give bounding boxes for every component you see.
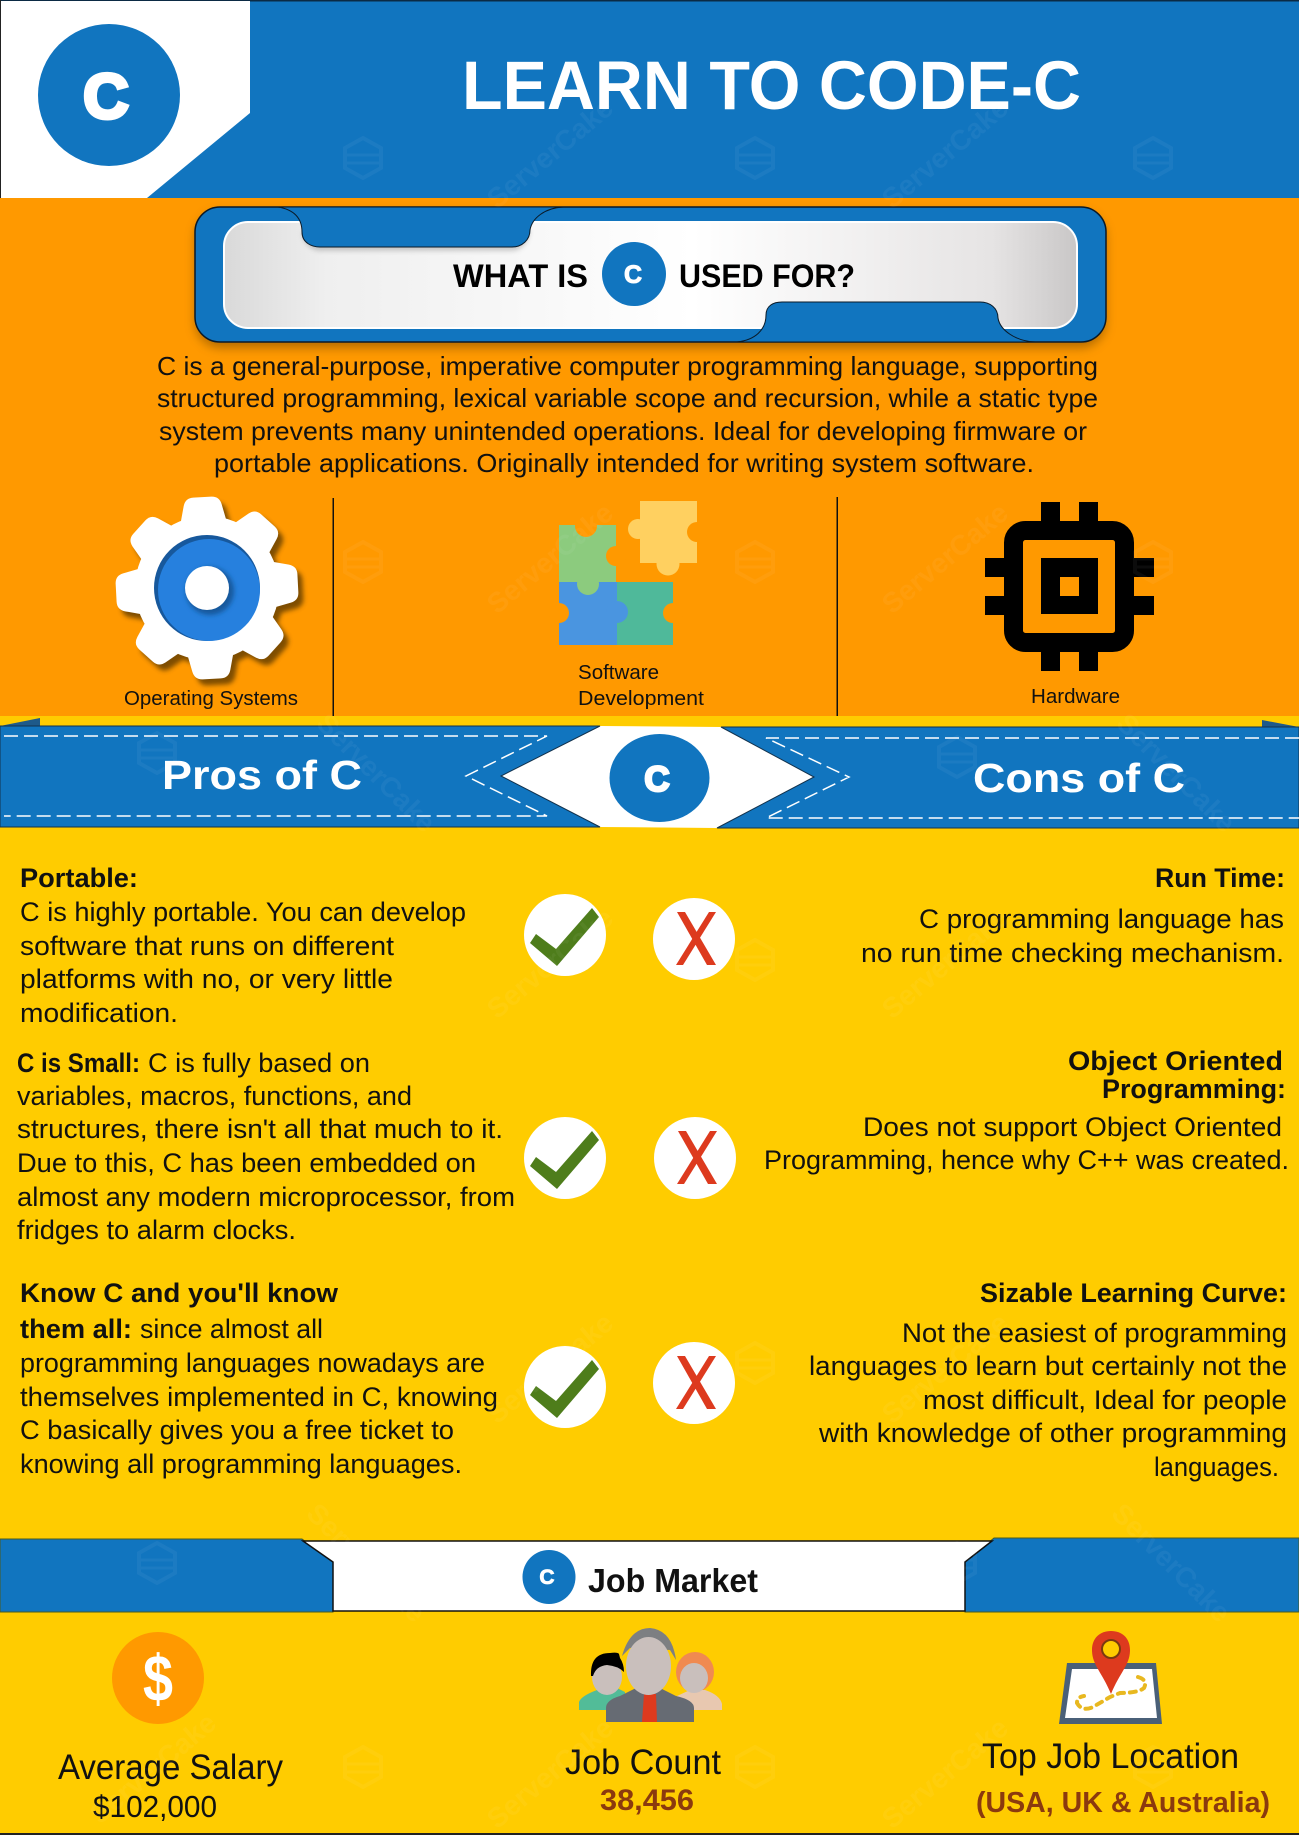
pro: portable: modification. — [20, 998, 178, 1028]
job count: 38,456 — [600, 1784, 694, 1817]
watermarks: ServerCake — [481, 497, 619, 620]
con: object oriented programming: Programming, hence why C++ was created. — [764, 1145, 1289, 1175]
label: hardware: Hardware — [1031, 686, 1120, 708]
con: sizable learning curve: languages. — [1154, 1452, 1279, 1482]
job market C badge: C — [539, 1566, 555, 1589]
pros ribbon: Pros of C — [162, 752, 362, 798]
pro: C is small: structures, there isn't all that much to it. — [17, 1114, 503, 1144]
intro paragraph: structured programming, lexical variable scope and recursion, while a static type — [157, 383, 1098, 413]
icon: check row 1 — [524, 894, 606, 976]
label: software development — [578, 662, 704, 710]
icon: cross row 2 — [654, 1117, 736, 1199]
con: object oriented programming: Programming: — [1102, 1074, 1286, 1104]
pro: portable: C is highly portable. You can develop — [20, 897, 466, 927]
logo: C badge: C — [83, 62, 129, 132]
logo: C badge — [38, 24, 180, 166]
watermarks: ServerCake — [481, 1307, 619, 1430]
con: run time: C programming language has — [919, 904, 1284, 934]
panel heading: WHAT IS — [453, 258, 588, 294]
pro: portable: Portable: — [20, 863, 138, 893]
watermarks: ServerCake — [876, 902, 1014, 1025]
job market heading: Job Market — [588, 1562, 758, 1599]
con: object oriented programming — [764, 1046, 1289, 1175]
label: software development: Software — [578, 662, 659, 684]
top tab — [278, 207, 563, 247]
top job location: Top Job Location — [982, 1737, 1239, 1776]
average salary: $102,000 — [93, 1789, 217, 1824]
pro: know C — [20, 1278, 498, 1479]
watermarks: ServerCake — [481, 902, 619, 1025]
icon: cross row 3 — [653, 1342, 735, 1424]
panel heading: USED FOR? — [679, 258, 855, 294]
icon: map pin — [1059, 1631, 1162, 1724]
pro: C is small: variables, macros, functions, and — [17, 1081, 412, 1111]
watermarks: ServerCake — [876, 92, 1014, 215]
intro paragraph: portable applications. Originally intended for writing system software. — [214, 448, 1034, 478]
con: sizable learning curve: Sizable Learning Curve: — [980, 1278, 1287, 1308]
watermarks: ServerCake — [481, 92, 619, 215]
watermarks: ServerCake — [311, 707, 442, 838]
job count: Job Count — [565, 1743, 721, 1782]
con: run time: no run time checking mechanism. — [861, 938, 1284, 968]
pro: know C: Know C and you'll know — [20, 1278, 338, 1308]
pro: know C: since almost all — [140, 1314, 323, 1344]
icon: check row 2 — [524, 1117, 606, 1199]
pro: C is small — [17, 1048, 515, 1245]
con: sizable learning curve: Not the easiest of programming — [902, 1318, 1287, 1348]
icon: gear (operating systems) — [115, 496, 304, 686]
top job location: (USA, UK & Australia) — [976, 1787, 1270, 1819]
panel heading — [453, 242, 855, 306]
watermarks: ServerCake — [1111, 707, 1242, 838]
job market C badge — [522, 1550, 576, 1604]
con: run time — [861, 863, 1285, 968]
pros and cons ribbon — [0, 718, 1299, 828]
con: run time: Run Time: — [1155, 863, 1285, 893]
watermarks: ServerCake — [1106, 1497, 1237, 1628]
cons ribbon: Cons of C — [973, 755, 1185, 801]
con: sizable learning curve: most difficult, Ideal for people — [923, 1385, 1287, 1415]
average salary — [58, 1748, 283, 1824]
cons ribbon — [717, 727, 1299, 828]
icon: check row 3 — [524, 1346, 606, 1428]
icon: cross row 1 — [653, 898, 735, 980]
watermarks: ServerCake — [84, 1707, 222, 1830]
pro: C is small: C is Small: — [17, 1048, 140, 1078]
pro: know C: them all: — [20, 1314, 132, 1344]
icon: salary dollar — [112, 1632, 204, 1724]
pro: portable — [20, 863, 466, 1028]
watermarks: ServerCake — [481, 1712, 619, 1835]
pro: portable: software that runs on different — [20, 931, 395, 961]
pro: know C: C basically gives you a free ticket to — [20, 1415, 454, 1445]
pro: C is small: C is fully based on — [148, 1048, 370, 1078]
panel: what is C used for — [195, 207, 1106, 348]
watermarks: ServerCake — [876, 497, 1014, 620]
con: sizable learning curve: with knowledge of other programming — [818, 1418, 1287, 1448]
pro: C is small: Due to this, C has been embedded on — [17, 1148, 476, 1178]
average salary: Average Salary — [58, 1748, 283, 1787]
header banner — [0, 0, 1299, 198]
intro paragraph: C is a general-purpose, imperative computer programming language, supporting — [157, 351, 1098, 381]
pro: know C: knowing all programming languages. — [20, 1449, 462, 1479]
top job location — [976, 1737, 1270, 1819]
ribbon C badge — [610, 734, 710, 822]
con: sizable learning curve — [809, 1278, 1287, 1482]
job count — [565, 1743, 721, 1817]
watermarks: ServerCake — [301, 1497, 432, 1628]
pros ribbon — [0, 726, 600, 827]
intro paragraph: system prevents many unintended operations. Ideal for developing firmware or — [159, 416, 1087, 446]
label: software development: Development — [578, 688, 704, 710]
pro: C is small: fridges to alarm clocks. — [17, 1215, 296, 1245]
intro paragraph — [157, 351, 1098, 478]
pro: know C: themselves implemented in C, knowing — [20, 1382, 498, 1412]
con: object oriented programming: Object Oriented — [1068, 1046, 1283, 1076]
pro: portable: platforms with no, or very little — [20, 964, 393, 994]
pro: know C: programming languages nowadays are — [20, 1348, 485, 1378]
job market banner — [0, 1538, 1299, 1612]
icon: people — [579, 1628, 722, 1722]
icon: salary dollar: $ — [143, 1641, 173, 1715]
label: operating systems: Operating Systems — [124, 688, 298, 710]
con: object oriented programming: Does not support Object Oriented — [863, 1112, 1282, 1142]
icon: chip (hardware) — [985, 502, 1154, 671]
watermarks: ServerCake — [876, 1712, 1014, 1835]
title: LEARN TO CODE-C — [462, 47, 1081, 124]
pro: C is small: almost any modern microprocessor, from — [17, 1182, 515, 1212]
panel heading: C — [624, 261, 642, 289]
con: sizable learning curve: languages to learn but certainly not the — [809, 1351, 1287, 1381]
icon: puzzle (software development) — [549, 501, 707, 645]
ribbon C badge: C — [644, 760, 670, 799]
bottom tab — [737, 302, 1035, 342]
watermarks: ServerCake — [876, 1307, 1014, 1430]
